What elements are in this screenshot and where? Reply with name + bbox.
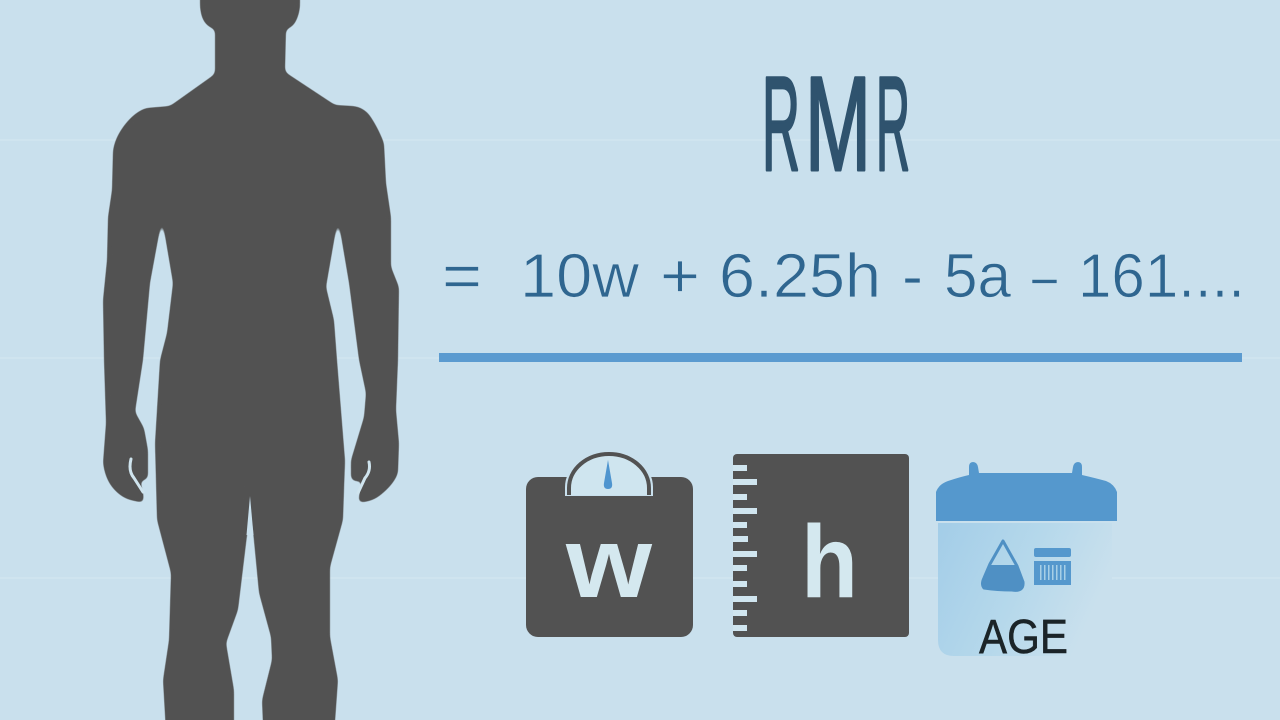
formula: 6.25h — [719, 242, 881, 311]
icon: small chart box — [1034, 548, 1071, 585]
icon: weight scale — [526, 451, 693, 637]
icon: height ruler: h — [801, 504, 858, 619]
formula: - — [902, 242, 923, 311]
formula: = — [442, 242, 482, 311]
formula: 161.... — [1078, 242, 1245, 311]
icon: height ruler — [733, 454, 909, 637]
title: RMR: M — [805, 50, 871, 199]
icon: calendar age — [936, 462, 1117, 664]
icon: weight scale: w — [565, 507, 652, 619]
title: RMR: R — [762, 50, 800, 199]
icon: flask — [982, 541, 1023, 590]
human body silhouette — [103, 0, 399, 720]
formula: + — [660, 242, 700, 311]
formula — [442, 242, 1245, 311]
icon: calendar age: AGE — [979, 611, 1068, 664]
formula: 5a — [944, 242, 1011, 311]
text: R — [876, 50, 910, 199]
formula: 10w — [520, 242, 639, 311]
divider rule — [439, 353, 1242, 362]
title: RMR — [762, 50, 910, 199]
formula: – — [1032, 242, 1057, 311]
